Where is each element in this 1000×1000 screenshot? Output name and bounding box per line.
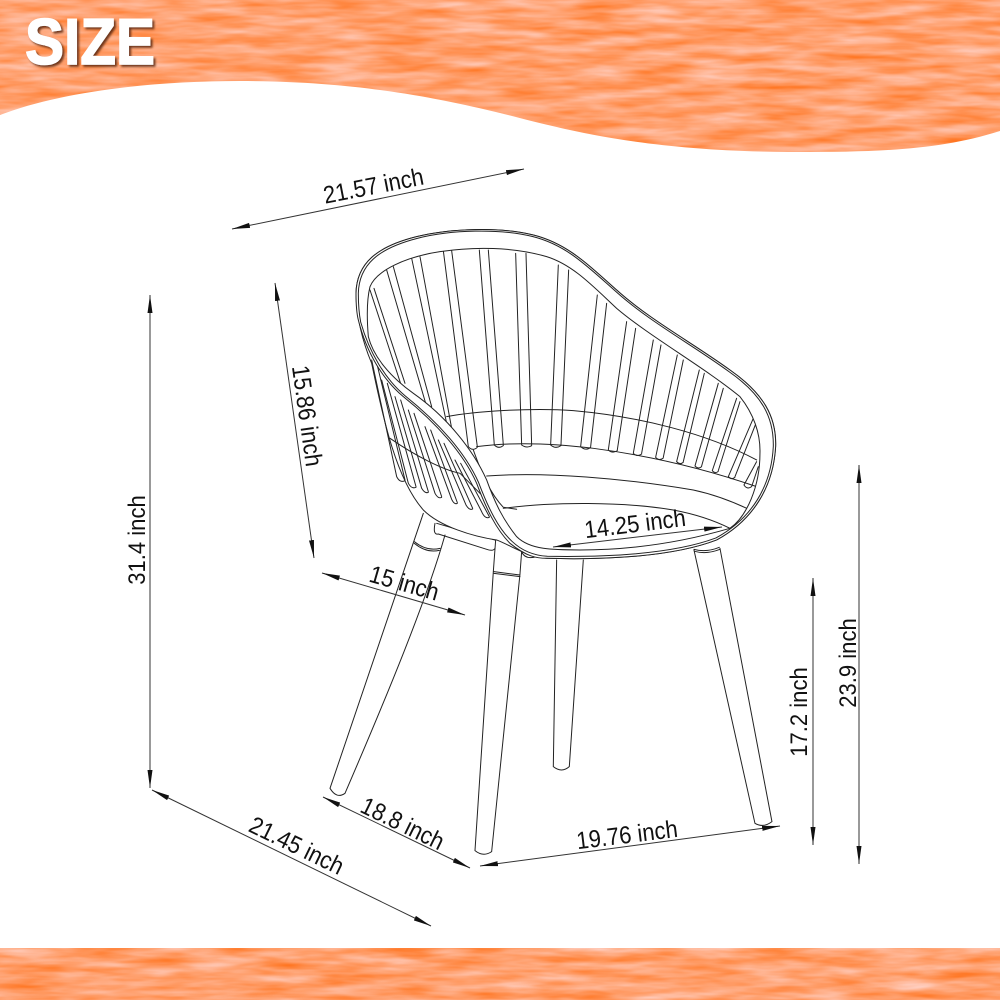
leg: back left — [330, 513, 445, 795]
dimension: back height 15.86 inch — [275, 283, 328, 558]
leg: back right — [553, 560, 583, 770]
top wood texture banner — [0, 0, 1000, 160]
shell outer silhouette — [356, 230, 776, 559]
dimension: seat depth 15 inch — [322, 560, 465, 615]
back spindles — [370, 250, 758, 488]
dimension: seat width 14.25 inch — [553, 504, 722, 547]
seat contour lines — [447, 409, 757, 528]
dimension lines — [123, 163, 861, 926]
dimension: leg width 19.76 inch: 19.76 inch — [575, 815, 679, 854]
chair seat shell — [356, 230, 776, 559]
dimension: seat width 14.25 inch: 14.25 inch — [583, 504, 687, 543]
dimension: leg depth 18.8 inch — [323, 792, 470, 868]
dimension: back height 15.86 inch: 15.86 inch — [287, 364, 328, 468]
dimension: total depth 21.45 inch: 21.45 inch — [245, 811, 348, 880]
dimension: back width 21.57 inch: 21.57 inch — [321, 163, 426, 209]
back opening — [367, 248, 760, 550]
front rim band — [356, 230, 776, 559]
dimension: seat depth 15 inch: 15 inch — [366, 560, 442, 606]
dimension: total height 31.4 inch: 31.4 inch — [123, 495, 150, 585]
leg: front centre — [475, 540, 522, 854]
dimension: seat height 17.2 inch: 17.2 inch — [785, 667, 812, 757]
chair legs — [330, 513, 772, 854]
dimension: total depth 21.45 inch — [152, 790, 431, 926]
under-seat bracket — [434, 523, 537, 558]
leg: front right — [694, 547, 772, 825]
title: SIZE — [25, 5, 155, 78]
dimension: back width 21.57 inch — [232, 163, 524, 229]
rim inner lines — [358, 231, 773, 556]
dimension: leg width 19.76 inch — [480, 815, 780, 866]
bottom wood texture band — [0, 948, 1000, 1000]
dimension: arm height 23.9 inch: 23.9 inch — [834, 618, 861, 708]
outer shell spindles and band — [372, 360, 489, 518]
dimension: leg depth 18.8 inch: 18.8 inch — [356, 792, 449, 855]
